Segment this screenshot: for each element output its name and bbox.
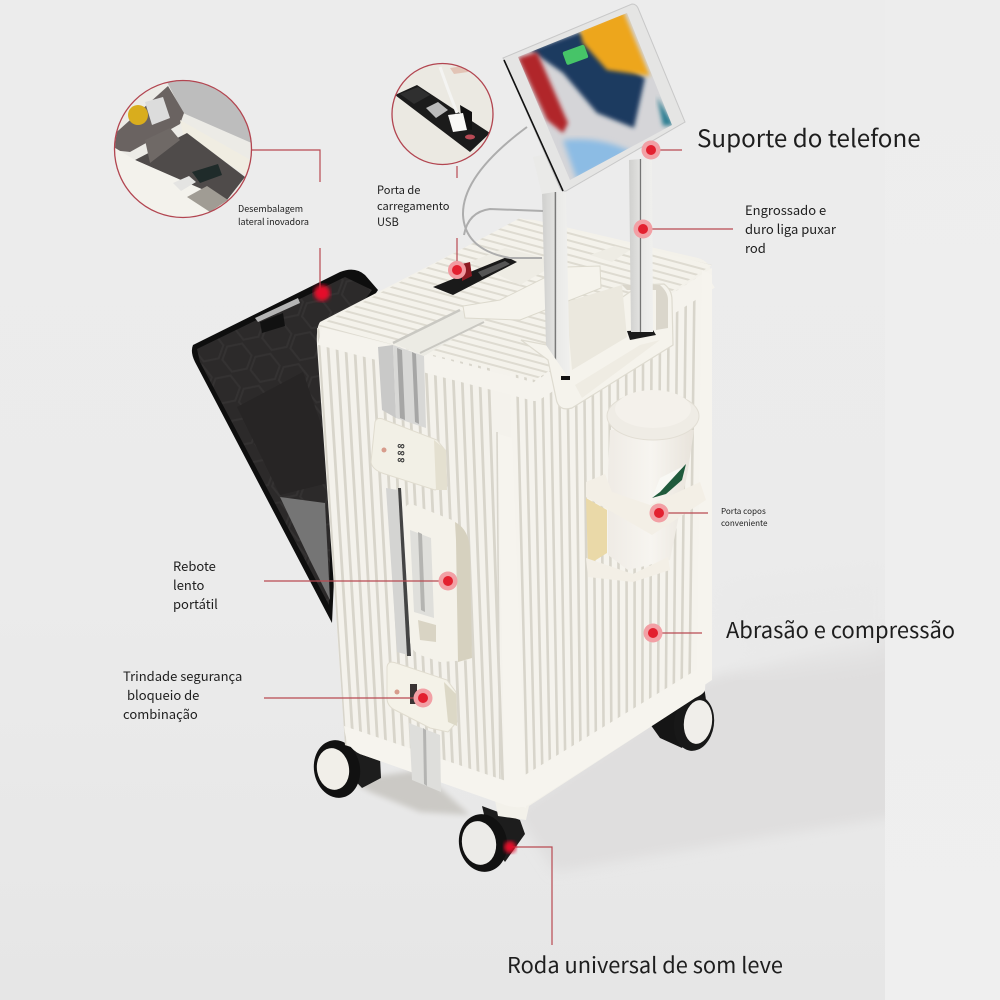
- floor shadow: [350, 570, 905, 872]
- marker: side opening: [314, 285, 330, 301]
- label: cup holder: Porta copos: [721, 506, 766, 517]
- top latch lock: 8: [394, 443, 407, 449]
- telescopic pull rod: [533, 154, 653, 380]
- wheel: left: [309, 736, 381, 802]
- top latch lock: 8: [394, 450, 407, 456]
- marker: pull rod: [634, 220, 652, 238]
- marker: wheel: [504, 841, 516, 853]
- label: pull rod: duro liga puxar: [745, 219, 837, 238]
- label: phone holder: Suporte do telefone: [697, 119, 921, 154]
- marker: USB port: [448, 261, 466, 279]
- lower latch lock: [387, 662, 457, 732]
- label: USB port: Porta de: [377, 182, 420, 198]
- label: USB port: carregamento: [377, 198, 450, 214]
- label: USB port: USB: [377, 214, 399, 230]
- USB cables: [463, 127, 543, 258]
- top rails: [470, 246, 630, 285]
- top latch lock: 8: [394, 457, 407, 463]
- label: slow rebound: lento: [173, 575, 205, 594]
- wheels: [309, 686, 718, 876]
- side face ribs: [516, 268, 712, 774]
- bottom rim: [344, 664, 706, 807]
- leader lines: [252, 150, 733, 945]
- label: combination lock: combinação: [123, 704, 198, 723]
- centre carry handle: [405, 504, 472, 662]
- label: cup holder: conveniente: [721, 518, 768, 529]
- tablet on holder: [500, 0, 690, 200]
- aluminium frame: [378, 310, 488, 792]
- marker: slow rebound handle: [438, 572, 458, 590]
- corner post: [498, 434, 526, 808]
- inset circle: side opening: [110, 78, 256, 220]
- handle well plate: [521, 284, 673, 409]
- inset circle: USB port: [392, 63, 494, 167]
- wheel: right: [650, 686, 718, 754]
- label: slow rebound: Rebote: [173, 556, 216, 575]
- TSA plate on top: [433, 257, 517, 295]
- label: pull rod: Engrossado e: [745, 200, 826, 219]
- cup holder with coffee cup: [586, 390, 706, 582]
- suitcase body: [316, 218, 714, 820]
- top carry grip: [463, 266, 601, 320]
- label: combination lock: bloqueio de: [127, 685, 199, 704]
- rounded top edge band: [320, 280, 710, 392]
- label: abrasion: Abrasão e compressão: [726, 614, 955, 645]
- marker: combination lock: [414, 688, 432, 708]
- open front lid: [192, 270, 378, 623]
- top face ridges: [318, 218, 712, 378]
- marker: abrasion: [644, 624, 662, 642]
- front face ribs: [317, 328, 504, 780]
- label: combination lock: Trindade segurança: [123, 666, 242, 685]
- label: wheel: Roda universal de som leve: [507, 949, 783, 980]
- label: side opening: Desembalagem: [238, 202, 303, 215]
- marker: cup holder: [650, 504, 668, 522]
- label: slow rebound: portátil: [173, 594, 218, 613]
- marker: phone holder: [642, 140, 660, 160]
- label: side opening: lateral inovadora: [238, 215, 309, 228]
- top latch lock: [371, 418, 447, 490]
- wheel: front: [454, 806, 525, 876]
- label: pull rod: rod: [745, 238, 766, 257]
- background right panel: [885, 0, 1000, 1000]
